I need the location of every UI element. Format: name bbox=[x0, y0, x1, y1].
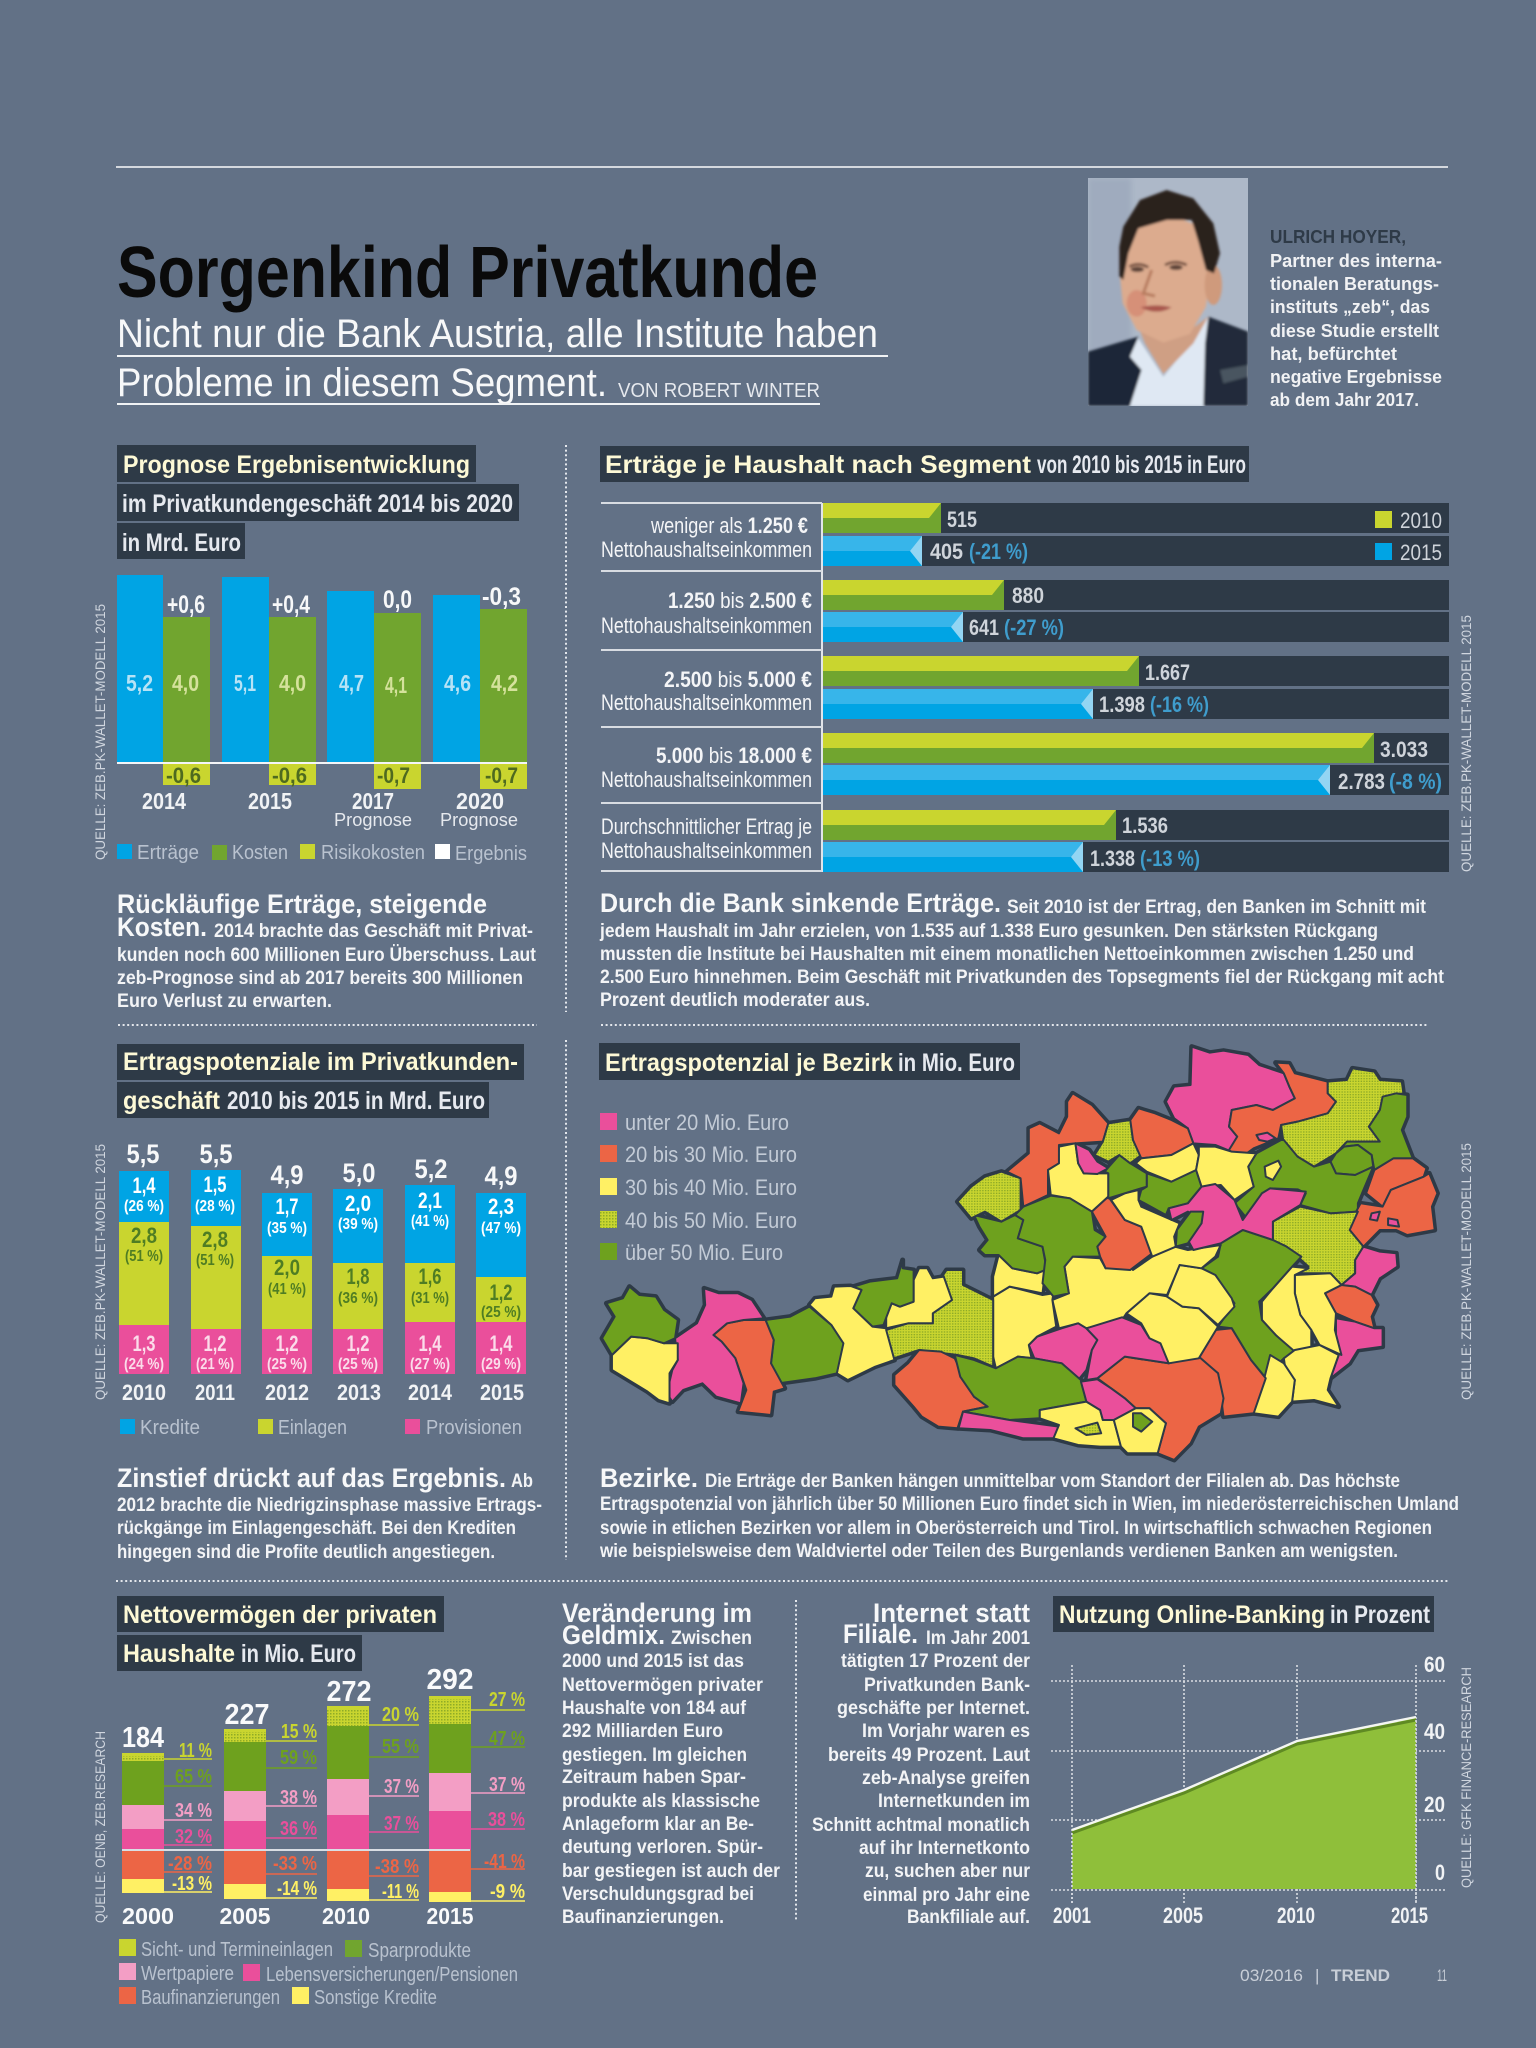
panel: ertragspotenziale bbox=[92, 1044, 542, 1563]
bar chart: haushalt segments: 405 bbox=[930, 539, 963, 564]
row labels: income segments: Nettohaushaltseinkommen bbox=[601, 537, 812, 562]
source: prognose: QUELLE: ZEB.PK-WALLET-MODELL 2015 bbox=[92, 604, 108, 860]
text block: internet statt filiale: Internet statt bbox=[873, 1598, 1030, 1628]
legend: map: 40 bis 50 Mio. Euro bbox=[625, 1208, 797, 1233]
bar chart: haushalt segments: (-27 %) bbox=[1004, 615, 1064, 640]
stacked bar chart: nettovermoegen: 11 % bbox=[179, 1740, 212, 1762]
heading: map: Ertragspotenzial je Bezirk bbox=[605, 1049, 893, 1077]
footer bbox=[1240, 1966, 1447, 1985]
stacked bar chart: nettovermoegen: 65 % bbox=[175, 1766, 212, 1788]
portrait caption: Partner des interna- bbox=[1270, 251, 1442, 271]
stacked bar chart: nettovermoegen: 38 % bbox=[280, 1787, 317, 1809]
stacked bar chart: ertragspotenziale: (51 %) bbox=[125, 1248, 163, 1265]
text block: internet statt filiale bbox=[812, 1598, 1031, 1928]
legend: nettovermoegen bbox=[119, 1939, 518, 2009]
text block: durch die bank: 2.500 Euro hinnehmen. Beim Geschäft mit Privatkunden des Topsegments fiel der Rückgang mit acht bbox=[600, 967, 1445, 988]
bar chart: haushalt segments: 1.338 bbox=[1090, 846, 1135, 871]
text block: geldmix: Anlageform klar an Be- bbox=[562, 1814, 754, 1835]
stacked bar chart: ertragspotenziale: 1,6 bbox=[418, 1264, 442, 1289]
stacked bar chart: ertragspotenziale: 1,3 bbox=[132, 1331, 156, 1356]
stacked bar chart: ertragspotenziale: (36 %) bbox=[338, 1290, 378, 1307]
heading: ertragspotenziale bbox=[117, 1044, 524, 1118]
source: nettovermoegen: QUELLE: OENB, ZEB.RESEARCH bbox=[92, 1731, 108, 1923]
panel: prognose bbox=[92, 445, 537, 1012]
area chart: online-banking: 2010 bbox=[1277, 1903, 1315, 1928]
legend: 2010 / 2015 bbox=[1375, 508, 1442, 565]
panel: online-banking bbox=[1051, 1596, 1474, 1928]
stacked bar chart: ertragspotenziale: (21 %) bbox=[196, 1356, 234, 1373]
bar chart: haushalt segments: 1.398 bbox=[1099, 692, 1145, 717]
stacked bar chart: ertragspotenziale: 1,4 bbox=[490, 1331, 513, 1356]
bar chart: haushalt segments: 1.536 bbox=[1122, 813, 1168, 838]
stacked bar chart: nettovermoegen: 34 % bbox=[175, 1800, 212, 1822]
text block: geldmix: deutung verloren. Spür- bbox=[562, 1837, 763, 1858]
bar chart: prognose: 4,0 bbox=[172, 670, 199, 696]
stacked bar chart: ertragspotenziale: 5,5 bbox=[126, 1139, 160, 1169]
stacked bar chart: ertragspotenziale: 2015 bbox=[480, 1380, 524, 1405]
stacked bar chart: nettovermoegen: 37 % bbox=[384, 1776, 419, 1798]
stacked bar chart: ertragspotenziale: 2,8 bbox=[131, 1223, 157, 1248]
bar chart: prognose: 2014 bbox=[142, 788, 186, 814]
stacked bar chart: ertragspotenziale: (31 %) bbox=[411, 1290, 449, 1307]
text block: rücklaeufige ertraege: Euro Verlust zu erwarten. bbox=[117, 991, 332, 1012]
source: online-banking: QUELLE: GFK FINANCE-RESEARCH bbox=[1458, 1667, 1474, 1888]
legend: map: 30 bis 40 Mio. Euro bbox=[625, 1175, 797, 1200]
bar chart: prognose: 4,2 bbox=[491, 670, 518, 696]
bar chart: prognose: 4,6 bbox=[444, 670, 471, 696]
heading: prognose: im Privatkundengeschäft 2014 bis 2020 bbox=[122, 490, 513, 518]
bar chart: prognose: +0,6 bbox=[167, 591, 205, 619]
legend: nettovermoegen: Sparprodukte bbox=[368, 1940, 471, 1962]
stacked bar chart: nettovermoegen: -13 % bbox=[172, 1873, 212, 1895]
legend: ertragspotenziale bbox=[120, 1417, 522, 1439]
bar chart: prognose: -0,6 bbox=[166, 763, 201, 788]
bar chart: haushalt segments: (-16 %) bbox=[1150, 692, 1209, 717]
heading: ertraege je haushalt bbox=[600, 446, 1249, 482]
legend: ertragspotenziale: Kredite bbox=[140, 1417, 200, 1439]
stacked bar chart: ertragspotenziale: (24 %) bbox=[124, 1356, 164, 1373]
portrait caption: negative Ergebnisse bbox=[1270, 367, 1442, 387]
text block: geldmix bbox=[562, 1598, 781, 1928]
stacked bar chart: ertragspotenziale: 5,5 bbox=[200, 1139, 232, 1169]
legend: 2010 / 2015: 2010 bbox=[1400, 508, 1442, 533]
footer: TREND bbox=[1331, 1966, 1390, 1985]
heading: prognose: in Mrd. Euro bbox=[122, 529, 241, 557]
stacked bar chart: nettovermoegen: 20 % bbox=[382, 1704, 419, 1726]
text block: internet statt filiale: zeb-Analyse greifen bbox=[862, 1768, 1030, 1789]
stacked bar chart: ertragspotenziale bbox=[119, 1139, 526, 1405]
bar chart: prognose: 0,0 bbox=[383, 586, 412, 614]
stacked bar chart: ertragspotenziale: (29 %) bbox=[481, 1356, 521, 1373]
stacked bar chart: ertragspotenziale: (41 %) bbox=[411, 1213, 449, 1230]
area chart: online-banking: 40 bbox=[1424, 1719, 1445, 1744]
stacked bar chart: nettovermoegen: 272 bbox=[326, 1676, 372, 1708]
row labels: income segments bbox=[601, 502, 823, 872]
legend: nettovermoegen: Baufinanzierungen bbox=[141, 1987, 280, 2009]
text block: internet statt filiale: tätigten 17 Prozent der bbox=[841, 1651, 1031, 1672]
legend: nettovermoegen: Wertpapiere bbox=[141, 1963, 234, 1985]
stacked bar chart: nettovermoegen: 15 % bbox=[281, 1721, 317, 1743]
panel: map ertragspotenzial je bezirk bbox=[599, 1043, 1474, 1562]
stacked bar chart: ertragspotenziale: 1,2 bbox=[490, 1280, 512, 1305]
bar chart: prognose: -0,3 bbox=[482, 583, 521, 611]
row labels: income segments: Nettohaushaltseinkommen bbox=[601, 690, 812, 715]
area chart: online-banking: 2001 bbox=[1053, 1903, 1091, 1928]
portrait caption: ab dem Jahr 2017. bbox=[1270, 390, 1419, 410]
stacked bar chart: ertragspotenziale: (47 %) bbox=[481, 1220, 521, 1237]
bar chart: prognose: +0,4 bbox=[272, 591, 310, 619]
stacked bar chart: ertragspotenziale: 2,8 bbox=[202, 1227, 228, 1252]
stacked bar chart: ertragspotenziale: 1,7 bbox=[276, 1194, 298, 1219]
text block: internet statt filiale: geschäfte per Internet. bbox=[837, 1698, 1030, 1719]
stacked bar chart: ertragspotenziale: 1,5 bbox=[204, 1172, 226, 1197]
stacked bar chart: ertragspotenziale: 2,3 bbox=[488, 1194, 514, 1219]
stacked bar chart: ertragspotenziale: 1,8 bbox=[346, 1264, 370, 1289]
stacked bar chart: nettovermoegen: 2010 bbox=[322, 1903, 370, 1929]
heading: online-banking: in Prozent bbox=[1330, 1601, 1431, 1629]
text block: bezirke: Die Erträge der Banken hängen unmittelbar vom Standort der Filialen ab. Das höchste bbox=[705, 1471, 1400, 1492]
subtitle: Nicht nur die Bank Austria, alle Institute haben bbox=[117, 312, 878, 356]
stacked bar chart: ertragspotenziale: (39 %) bbox=[338, 1216, 378, 1233]
subtitle: Probleme in diesem Segment. bbox=[117, 361, 607, 405]
bar chart: prognose: -0,7 bbox=[485, 763, 518, 788]
bar chart: prognose: 2017 bbox=[352, 788, 394, 814]
heading: ertragspotenziale: 2010 bis 2015 in Mrd. Euro bbox=[227, 1087, 485, 1115]
portrait caption bbox=[1270, 227, 1442, 410]
stacked bar chart: nettovermoegen: -33 % bbox=[273, 1853, 317, 1875]
stacked bar chart: nettovermoegen: -41 % bbox=[484, 1851, 525, 1873]
bar chart: haushalt segments: (-8 %) bbox=[1389, 769, 1442, 794]
text block: durch die bank: Seit 2010 ist der Ertrag, den Banken im Schnitt mit bbox=[1007, 897, 1427, 918]
stacked bar chart: ertragspotenziale: 1,2 bbox=[276, 1331, 298, 1356]
bar chart: haushalt segments: 1.667 bbox=[1145, 660, 1190, 685]
footer: 03/2016 bbox=[1240, 1966, 1303, 1985]
area chart: online-banking: 20 bbox=[1424, 1792, 1445, 1817]
stacked bar chart: nettovermoegen: -14 % bbox=[277, 1878, 317, 1900]
text block: internet statt filiale: Im Jahr 2001 bbox=[926, 1628, 1030, 1649]
legend: nettovermoegen: Lebensversicherungen/Pensionen bbox=[266, 1964, 518, 1986]
text block: rücklaeufige ertraege: zeb-Prognose sind ab 2017 bereits 300 Millionen bbox=[117, 968, 523, 989]
legend: ertragspotenziale: Einlagen bbox=[278, 1417, 347, 1439]
row labels: income segments: Nettohaushaltseinkommen bbox=[601, 767, 812, 792]
bar chart: haushalt segments: 3.033 bbox=[1380, 737, 1428, 762]
text block: bezirke bbox=[599, 1463, 1459, 1562]
stacked bar chart: ertragspotenziale: 2012 bbox=[265, 1380, 309, 1405]
text block: internet statt filiale: Internetkunden im bbox=[878, 1791, 1030, 1812]
text block: internet statt filiale: auf ihr Internetkonto bbox=[859, 1838, 1030, 1859]
legend: map: 20 bis 30 Mio. Euro bbox=[625, 1142, 797, 1167]
source: haushalt: QUELLE: ZEB.PK-WALLET-MODELL 2015 bbox=[1458, 615, 1474, 872]
heading: online-banking bbox=[1053, 1596, 1434, 1632]
portrait caption: ULRICH HOYER, bbox=[1270, 227, 1406, 247]
bar chart: prognose bbox=[117, 575, 527, 830]
stacked bar chart: nettovermoegen: -28 % bbox=[168, 1853, 212, 1875]
text block: geldmix: Nettovermögen privater bbox=[562, 1675, 764, 1696]
stacked bar chart: ertragspotenziale: 1,4 bbox=[418, 1331, 442, 1356]
stacked bar chart: nettovermoegen: 55 % bbox=[382, 1736, 419, 1758]
bar chart: prognose: 2020 bbox=[456, 788, 504, 814]
text block: zinstief: Ab bbox=[511, 1471, 533, 1492]
portrait caption: tionalen Beratungs- bbox=[1270, 274, 1439, 294]
bar chart: prognose: -0,7 bbox=[377, 763, 410, 788]
text block: bezirke: Bezirke. bbox=[600, 1463, 698, 1493]
area chart: online-banking: 2005 bbox=[1163, 1903, 1203, 1928]
bar chart: haushalt segments bbox=[822, 503, 1449, 872]
source: ertragspotenziale: QUELLE: ZEB.PK-WALLET-MODELL 2015 bbox=[92, 1144, 108, 1400]
bar chart: prognose: 4,1 bbox=[385, 672, 407, 698]
text block: internet statt filiale: einmal pro Jahr eine bbox=[863, 1885, 1030, 1906]
stacked bar chart: nettovermoegen: 2000 bbox=[122, 1903, 174, 1929]
row labels: income segments: Durchschnittlicher Ertrag je bbox=[601, 814, 812, 839]
stacked bar chart: nettovermoegen: -38 % bbox=[375, 1856, 419, 1878]
stacked bar chart: nettovermoegen: 37 % bbox=[384, 1813, 419, 1835]
bar chart: haushalt segments: 641 bbox=[969, 615, 999, 640]
heading: nettovermoegen bbox=[117, 1596, 444, 1671]
heading: prognose bbox=[117, 445, 519, 559]
stacked bar chart: nettovermoegen bbox=[122, 1664, 525, 1929]
bar chart: prognose: Prognose bbox=[334, 810, 412, 830]
text block: durch die bank: Durch die Bank sinkende Erträge. bbox=[600, 888, 1001, 918]
row labels: income segments: 2.500 bis 5.000 € bbox=[664, 667, 812, 692]
text block: durch die bank: jedem Haushalt im Jahr erzielen, von 1.535 auf 1.338 Euro gesunken. Den stärksten Rückgang bbox=[599, 921, 1378, 942]
heading: ertragspotenziale: geschäft bbox=[123, 1087, 221, 1115]
text block: internet statt filiale: Privatkunden Bank- bbox=[864, 1675, 1030, 1696]
heading: ertraege je haushalt: von 2010 bis 2015 in Euro bbox=[1037, 451, 1246, 479]
text block: durch die bank bbox=[599, 888, 1445, 1011]
bar chart: prognose: 4,7 bbox=[339, 670, 364, 696]
bar chart: haushalt segments: (-13 %) bbox=[1140, 846, 1200, 871]
text block: rücklaeufige ertraege bbox=[117, 889, 537, 1012]
legend: map: über 50 Mio. Euro bbox=[625, 1240, 783, 1265]
stacked bar chart: nettovermoegen: 27 % bbox=[489, 1689, 525, 1711]
legend: nettovermoegen: Sicht- und Termineinlagen bbox=[141, 1939, 333, 1961]
stacked bar chart: ertragspotenziale: 5,2 bbox=[414, 1154, 448, 1184]
heading: map: in Mio. Euro bbox=[898, 1049, 1015, 1077]
area chart: online-banking: 2015 bbox=[1391, 1903, 1428, 1928]
stacked bar chart: nettovermoegen: 32 % bbox=[175, 1826, 212, 1848]
stacked bar chart: nettovermoegen: -9 % bbox=[490, 1881, 525, 1903]
text block: zinstief: hingegen sind die Profite deutlich angestiegen. bbox=[117, 1542, 495, 1563]
panel: nettovermoegen bbox=[92, 1596, 525, 2009]
stacked bar chart: nettovermoegen: 292 bbox=[426, 1664, 474, 1696]
text block: durch die bank: mussten die Institute bei Haushalten mit einem monatlichen Nettoeinkommen zwischen 1.250 und bbox=[600, 944, 1414, 965]
text block: geldmix: Veränderung im bbox=[562, 1598, 752, 1628]
text block: rücklaeufige ertraege: kunden noch 600 Millionen Euro Überschuss. Laut bbox=[117, 945, 537, 966]
stacked bar chart: nettovermoegen: 2015 bbox=[426, 1903, 474, 1929]
row labels: income segments: Nettohaushaltseinkommen bbox=[601, 838, 812, 863]
text block: geldmix: 292 Milliarden Euro bbox=[562, 1721, 723, 1742]
stacked bar chart: nettovermoegen: -11 % bbox=[382, 1881, 419, 1903]
legend: nettovermoegen: Sonstige Kredite bbox=[314, 1987, 437, 2009]
stacked bar chart: ertragspotenziale: (25 %) bbox=[481, 1304, 521, 1321]
heading: nettovermoegen: Haushalte bbox=[123, 1640, 235, 1668]
stacked bar chart: ertragspotenziale: 1,2 bbox=[346, 1331, 370, 1356]
legend: prognose: Erträge bbox=[137, 842, 199, 864]
legend: prognose: Risikokosten bbox=[321, 842, 425, 864]
stacked bar chart: nettovermoegen: 37 % bbox=[489, 1774, 525, 1796]
stacked bar chart: ertragspotenziale: 2,1 bbox=[418, 1188, 442, 1213]
bar chart: haushalt segments: (-21 %) bbox=[969, 539, 1028, 564]
stacked bar chart: ertragspotenziale: (27 %) bbox=[410, 1356, 450, 1373]
text block: geldmix: Baufinanzierungen. bbox=[562, 1907, 724, 1928]
row labels: income segments: 5.000 bis 18.000 € bbox=[656, 743, 812, 768]
text block: geldmix: Geldmix. bbox=[562, 1620, 665, 1650]
text block: internet statt filiale: Filiale. bbox=[843, 1619, 918, 1649]
bar chart: prognose: 2015 bbox=[248, 788, 292, 814]
footer: 11 bbox=[1437, 1966, 1447, 1985]
text block: geldmix: Verschuldungsgrad bei bbox=[562, 1884, 754, 1905]
panel: ertraege je haushalt bbox=[599, 446, 1474, 1011]
map of Austria districts bbox=[602, 1047, 1437, 1460]
portrait photo bbox=[1088, 178, 1248, 406]
heading: nettovermoegen: in Mio. Euro bbox=[241, 1640, 356, 1668]
text block: zinstief bbox=[117, 1463, 542, 1563]
footer: | bbox=[1315, 1966, 1319, 1985]
heading: map bbox=[599, 1043, 1020, 1080]
stacked bar chart: ertragspotenziale: 2011 bbox=[195, 1380, 235, 1405]
stacked bar chart: ertragspotenziale: 2010 bbox=[122, 1380, 166, 1405]
text block: geldmix: produkte als klassische bbox=[562, 1791, 760, 1812]
stacked bar chart: ertragspotenziale: 4,9 bbox=[270, 1160, 304, 1190]
legend: prognose: Kosten bbox=[232, 842, 288, 864]
stacked bar chart: ertragspotenziale: 2,0 bbox=[345, 1191, 371, 1216]
stacked bar chart: ertragspotenziale: 2014 bbox=[408, 1380, 453, 1405]
text block: geldmix: gestiegen. Im gleichen bbox=[562, 1745, 747, 1766]
row labels: income segments: Nettohaushaltseinkommen bbox=[601, 613, 812, 638]
stacked bar chart: ertragspotenziale: (51 %) bbox=[196, 1252, 234, 1269]
text block: rücklaeufige ertraege: Kosten. bbox=[117, 912, 207, 942]
area chart: online-banking: 0 bbox=[1435, 1860, 1445, 1885]
text block: internet statt filiale: Schnitt achtmal monatlich bbox=[812, 1815, 1030, 1836]
text block: zinstief: rückgänge im Einlagengeschäft. Bei den Krediten bbox=[117, 1518, 516, 1539]
stacked bar chart: nettovermoegen: 38 % bbox=[488, 1809, 525, 1831]
text block: geldmix: Zeitraum haben Spar- bbox=[562, 1767, 746, 1788]
stacked bar chart: ertragspotenziale: 4,9 bbox=[484, 1161, 518, 1191]
title: Sorgenkind Privatkunde bbox=[117, 233, 818, 313]
text block: geldmix: bar gestiegen ist auch der bbox=[562, 1861, 781, 1882]
text block: zinstief: Zinstief drückt auf das Ergebnis. bbox=[117, 1463, 506, 1493]
heading: ertragspotenziale: Ertragspotenziale im Privatkunden- bbox=[123, 1048, 518, 1076]
text block: internet statt filiale: Im Vorjahr waren es bbox=[862, 1721, 1030, 1742]
stacked bar chart: nettovermoegen: 47 % bbox=[489, 1728, 525, 1750]
portrait caption: instituts „zeb“, das bbox=[1270, 297, 1430, 317]
row labels: income segments: 1.250 bis 2.500 € bbox=[668, 588, 812, 613]
text block: bezirke: Ertragspotenzial von jährlich über 50 Millionen Euro findet sich in Wien, im niederösterreichischen Umland bbox=[600, 1494, 1459, 1515]
text block: geldmix: 2000 und 2015 ist das bbox=[562, 1651, 744, 1672]
stacked bar chart: ertragspotenziale: (25 %) bbox=[267, 1356, 307, 1373]
stacked bar chart: ertragspotenziale: 2,0 bbox=[274, 1255, 300, 1280]
heading: online-banking: Nutzung Online-Banking bbox=[1059, 1601, 1325, 1629]
bar chart: prognose: Prognose bbox=[440, 810, 518, 830]
portrait caption: diese Studie erstellt bbox=[1270, 321, 1439, 341]
text block: geldmix: Haushalte von 184 auf bbox=[562, 1698, 747, 1719]
heading: nettovermoegen: Nettovermögen der privaten bbox=[123, 1601, 437, 1629]
bar chart: prognose: 5,2 bbox=[126, 670, 153, 696]
stacked bar chart: ertragspotenziale: (28 %) bbox=[195, 1198, 235, 1215]
bar chart: haushalt segments: 2.783 bbox=[1338, 769, 1385, 794]
stacked bar chart: ertragspotenziale: 1,2 bbox=[204, 1331, 226, 1356]
stacked bar chart: nettovermoegen: 2005 bbox=[220, 1903, 271, 1929]
row labels: income segments: weniger als 1.250 € bbox=[650, 513, 808, 538]
portrait caption: hat, befürchtet bbox=[1270, 344, 1397, 364]
text block: internet statt filiale: zu, suchen aber nur bbox=[865, 1861, 1031, 1882]
text block: internet statt filiale: bereits 49 Prozent. Laut bbox=[828, 1745, 1031, 1766]
source: map: QUELLE: ZEB.PK-WALLET-MODELL 2015 bbox=[1458, 1143, 1474, 1400]
stacked bar chart: ertragspotenziale: (41 %) bbox=[268, 1281, 306, 1298]
stacked bar chart: ertragspotenziale: 1,4 bbox=[132, 1173, 156, 1198]
text block: internet statt filiale: Bankfiliale auf. bbox=[907, 1907, 1030, 1928]
legend: ertragspotenziale: Provisionen bbox=[426, 1417, 522, 1439]
bar chart: prognose: 4,0 bbox=[279, 670, 306, 696]
stacked bar chart: nettovermoegen: 59 % bbox=[280, 1747, 317, 1769]
legend: 2010 / 2015: 2015 bbox=[1400, 540, 1442, 565]
bar chart: haushalt segments: 515 bbox=[947, 507, 977, 532]
text block: bezirke: sowie in etlichen Bezirken vor allem in Oberösterreich und Tirol. In wirtschaftlich schwachen Regionen bbox=[600, 1518, 1432, 1539]
legend: map bbox=[600, 1110, 797, 1265]
bar chart: prognose: 5,1 bbox=[234, 670, 256, 696]
stacked bar chart: ertragspotenziale: (26 %) bbox=[124, 1198, 164, 1215]
subtitle: VON ROBERT WINTER bbox=[618, 380, 820, 402]
text block: durch die bank: Prozent deutlich moderater aus. bbox=[600, 990, 870, 1011]
heading: ertraege je haushalt: Erträge je Haushalt nach Segment bbox=[605, 451, 1032, 479]
subtitle bbox=[117, 312, 888, 405]
text block: rücklaeufige ertraege: Rückläufige Erträge, steigende bbox=[117, 889, 487, 919]
text block: geldmix: Zwischen bbox=[671, 1628, 752, 1649]
stacked bar chart: ertragspotenziale: (25 %) bbox=[338, 1356, 378, 1373]
area chart: online-banking: 60 bbox=[1424, 1652, 1445, 1677]
stacked bar chart: ertragspotenziale: 2013 bbox=[337, 1380, 381, 1405]
bar chart: prognose: -0,6 bbox=[272, 763, 307, 788]
stacked bar chart: ertragspotenziale: 5,0 bbox=[342, 1158, 376, 1188]
legend: map: unter 20 Mio. Euro bbox=[625, 1110, 789, 1135]
legend: prognose: Ergebnis bbox=[455, 843, 527, 865]
bar chart: haushalt segments: 880 bbox=[1012, 583, 1044, 608]
text block: bezirke: wie beispielsweise dem Waldviertel oder Teilen des Burgenlands verdienen Banken am wenigsten. bbox=[599, 1541, 1398, 1562]
stacked bar chart: nettovermoegen: 184 bbox=[122, 1722, 164, 1754]
stacked bar chart: nettovermoegen: 227 bbox=[224, 1699, 270, 1731]
stacked bar chart: ertragspotenziale: (35 %) bbox=[267, 1220, 307, 1237]
heading: prognose: Prognose Ergebnisentwicklung bbox=[123, 451, 470, 479]
text block: rücklaeufige ertraege: 2014 brachte das Geschäft mit Privat- bbox=[214, 921, 533, 942]
text block: zinstief: 2012 brachte die Niedrigzinsphase massive Ertrags- bbox=[117, 1495, 542, 1516]
stacked bar chart: nettovermoegen: 36 % bbox=[280, 1818, 317, 1840]
area chart: online-banking bbox=[1051, 1652, 1445, 1928]
legend: prognose bbox=[117, 842, 527, 865]
